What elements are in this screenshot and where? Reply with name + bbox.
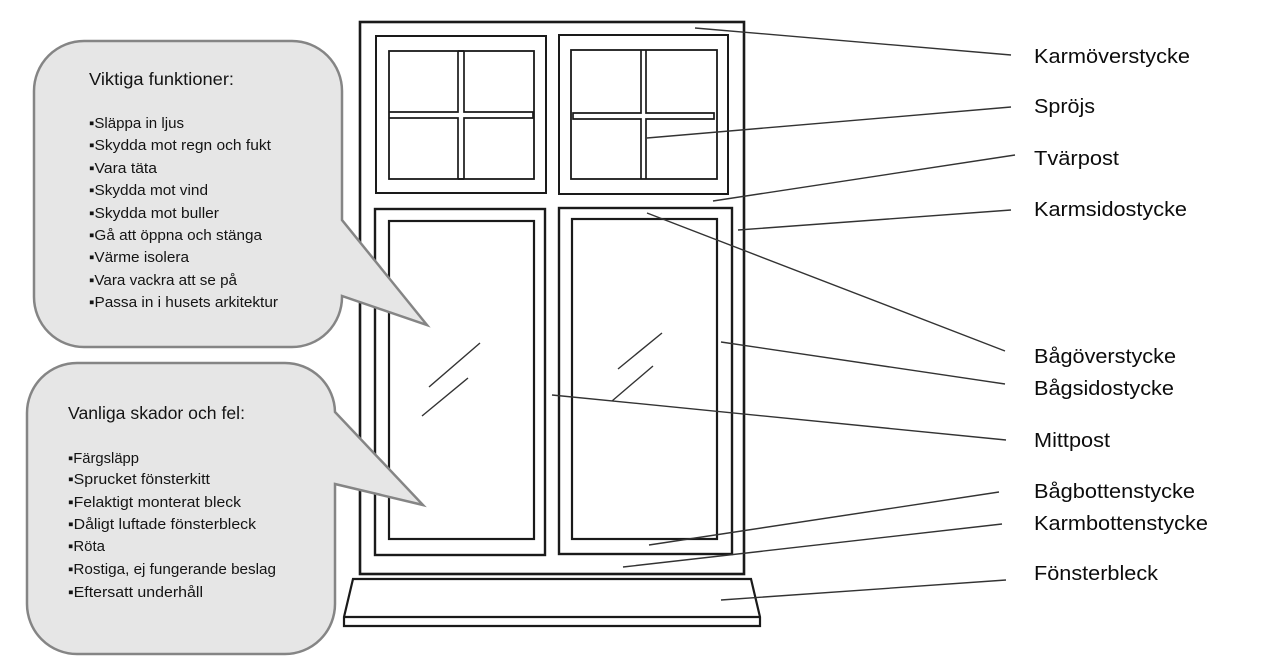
glass reflections — [422, 333, 662, 416]
list of functions: ▪Vara täta — [89, 160, 158, 177]
window diagram — [344, 22, 760, 626]
part labels: Fönsterbleck — [1034, 562, 1159, 585]
callout: vanliga skador och fel — [27, 363, 423, 654]
list of damages: ▪Felaktigt monterat bleck — [68, 494, 242, 511]
callout bubble shape — [27, 363, 423, 654]
list of damages: ▪Eftersatt underhåll — [68, 584, 203, 601]
list of functions: ▪Skydda mot regn och fukt — [89, 137, 272, 154]
part labels: Karmbottenstycke — [1034, 512, 1208, 535]
part labels: Bågöverstycke — [1034, 345, 1176, 368]
list of functions: ▪Gå att öppna och stänga — [89, 227, 263, 244]
outer frame — [360, 22, 744, 574]
list of functions — [89, 115, 278, 311]
part labels: Bågbottenstycke — [1034, 480, 1195, 503]
list of functions: ▪Värme isolera — [89, 249, 190, 266]
list of functions: ▪Passa in i husets arkitektur — [89, 294, 278, 311]
lower left sash — [375, 209, 545, 555]
callout heading: Vanliga skador och fel: — [68, 403, 245, 423]
window sill — [344, 579, 760, 626]
callout: viktiga funktioner — [34, 41, 427, 347]
list of functions: ▪Släppa in ljus — [89, 115, 184, 132]
lower right sash — [559, 208, 732, 554]
part labels: Bågsidostycke — [1034, 377, 1174, 400]
list of functions: ▪Skydda mot buller — [89, 205, 219, 222]
list of functions: ▪Vara vackra att se på — [89, 272, 238, 289]
callout heading: Viktiga funktioner: — [89, 69, 234, 89]
part labels: Mittpost — [1034, 429, 1110, 452]
part labels — [1034, 45, 1208, 585]
list of functions: ▪Skydda mot vind — [89, 182, 208, 199]
upper left sash — [376, 36, 546, 193]
list of damages: ▪Dåligt luftade fönsterbleck — [68, 516, 257, 533]
list of damages: ▪Röta — [68, 538, 106, 555]
part labels: Karmöverstycke — [1034, 45, 1190, 68]
callout bubble shape — [34, 41, 427, 347]
list of damages: ▪Färgsläpp — [68, 450, 139, 467]
part labels: Karmsidostycke — [1034, 198, 1187, 221]
leader lines — [552, 28, 1015, 600]
list of damages: ▪Rostiga, ej fungerande beslag — [68, 561, 276, 578]
list of damages — [68, 450, 276, 601]
part labels: Tvärpost — [1034, 147, 1119, 170]
list of damages: ▪Sprucket fönsterkitt — [68, 471, 211, 488]
upper right sash — [559, 35, 728, 194]
part labels: Spröjs — [1034, 95, 1095, 118]
